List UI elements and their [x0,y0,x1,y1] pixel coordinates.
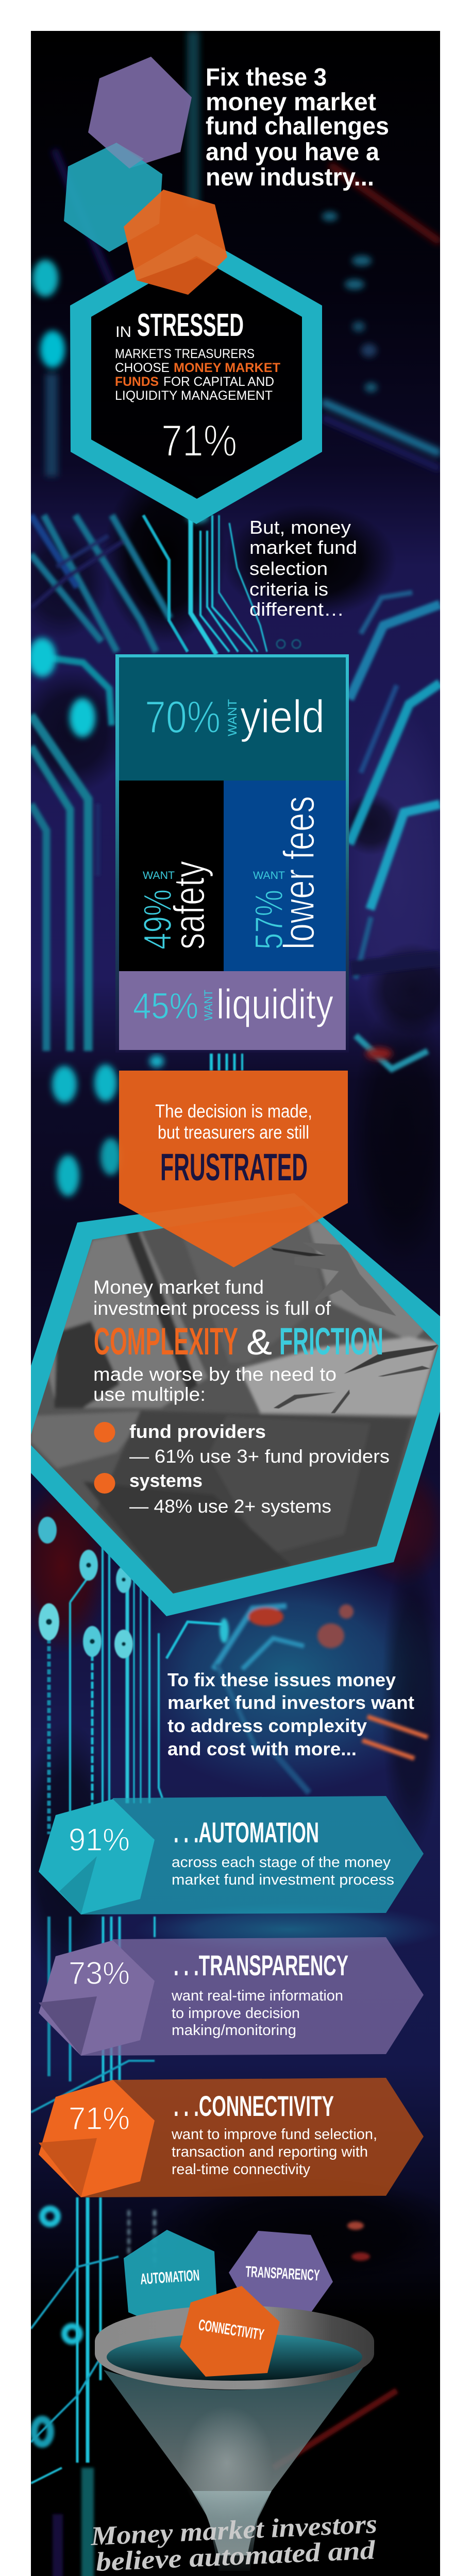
text: made worse: use multiple: [93,1384,206,1405]
icon: teal hexagon 91%: 91% [69,1822,130,1858]
text: selection criteria intro: market fund [249,537,357,558]
cell: safety: WANT [143,870,175,882]
chalk text: money market investors believe: believe automated and [95,2535,376,2576]
cell: lower fees [224,781,346,971]
text: markets treasurers choose money market funds: CHOOSE [115,361,170,375]
panel: frustrated arrow: FRUSTRATED [160,1146,308,1189]
list: fund providers: — 61% use 3+ fund providers [129,1446,390,1467]
text: markets treasurers choose money market funds: FOR CAPITAL AND [163,375,274,389]
text: markets treasurers choose money market funds: FUNDS [115,375,159,389]
text: markets treasurers choose money market funds: LIQUIDITY MANAGEMENT [115,388,273,403]
panel: stressed markets hexagon [70,234,322,524]
cell: yield [119,657,346,781]
heading: complexity and friction: FRICTION [279,1320,383,1363]
cell: lower fees: lower fees [275,796,323,950]
text: to fix these issues: To fix these issues money [167,1669,396,1690]
funnel body [95,2306,374,2571]
text: selection criteria intro: different… [249,599,344,620]
icon: connectivity hexagon [180,2286,280,2377]
panel: transparency: making/monitoring [172,2022,296,2039]
panel: frustrated arrow [119,1071,348,1267]
text: markets treasurers choose money market funds: MONEY MARKET [174,361,280,375]
icon: purple hexagon 73% [39,1940,155,2056]
icon: orange hexagon [124,190,227,295]
heading: complexity and friction [95,1328,382,1355]
text: selection criteria intro: selection [249,558,328,579]
panel: selection criteria treemap [115,654,349,1053]
title [206,64,389,191]
icon: orange hexagon 71%: 71% [69,2101,130,2137]
cell: liquidity: 45% [133,986,198,1027]
panel: automation: market fund investment process [172,1872,394,1888]
panel: transparency: . . .TRANSPARENCY [174,1949,348,1981]
panel: automation: . . .AUTOMATION [174,1816,319,1849]
text: markets treasurers choose money market funds: MARKETS TREASURERS [115,347,255,361]
list: systems: systems [129,1470,203,1491]
heading: in stressed: STRESSED [137,308,244,343]
cell: liquidity [119,971,346,1050]
text: selection criteria intro: criteria is [249,579,328,600]
text: to fix these issues: to address complexity [167,1715,367,1736]
list: fund providers: fund providers [129,1421,266,1442]
text: selection criteria intro: But, money [249,517,351,538]
cell: safety: safety [165,861,213,950]
panel: connectivity: real-time connectivity [172,2161,310,2178]
icon: purple hexagon 73%: 73% [69,1956,130,1991]
chalk text: money market investors believe [90,2510,378,2576]
heading: complexity and friction: COMPLEXITY [94,1320,238,1363]
cell: yield: yield [240,691,325,743]
chalk text: money market investors believe: Money market investors [90,2510,378,2551]
panel: automation: across each stage of the money [172,1854,391,1871]
panel: frustrated arrow: but treasurers are still [158,1122,309,1143]
title: money market [206,89,376,116]
text: made worse: made worse by the need to [93,1364,337,1385]
cell: lower fees: WANT [253,870,285,882]
panel: transparency [39,1937,424,2056]
panel: connectivity: . . .CONNECTIVITY [174,2090,334,2122]
cell: liquidity: liquidity [216,981,333,1028]
text: to fix these issues: market fund investors want [167,1692,414,1713]
circuit traces: bright converging lines [143,495,300,1071]
cell: safety: 49% [136,889,180,950]
icon: teal hexagon 91% [39,1799,155,1914]
title: new industry... [206,164,374,191]
funnel with three hexagons [95,2230,374,2571]
list: systems [94,1470,331,1517]
icon: transparency hexagon [229,2231,333,2325]
cell: lower fees: 57% [247,890,291,950]
circuit traces: top zone [32,31,440,477]
panel: frustrated arrow: The decision is made, [155,1100,312,1122]
heading: in stressed: IN [115,324,131,341]
text: made worse [93,1364,337,1405]
panel: complexity and friction photo hexagon [28,1193,446,1626]
panel: connectivity: want to improve fund selection, [171,2126,377,2143]
panel: transparency: to improve decision [172,2005,300,2022]
cell: yield: 70% [145,691,221,742]
panel: automation [39,1796,424,1914]
text: markets treasurers choose money market funds [115,347,280,403]
text: to fix these issues: and cost with more... [167,1738,357,1759]
text: process is full of [93,1277,331,1319]
circuit traces: blurred around treemap [31,515,440,1069]
icon: orange hexagon 71% [39,2080,155,2197]
panel: connectivity [39,2078,424,2197]
list: systems: — 48% use 2+ systems [129,1496,331,1517]
title: Fix these 3 [206,64,327,91]
panel: transparency: want real-time information [171,1988,343,2004]
stat: 71%: 71% [161,416,237,466]
panel: connectivity: transaction and reporting with [172,2144,368,2160]
heading: complexity and friction: & [246,1322,272,1362]
icon: automation hexagon [124,2230,217,2333]
text: process is full of: investment process is full of [93,1298,331,1319]
text: process is full of: Money market fund [93,1277,264,1298]
icon: connectivity hexagon: CONNECTIVITY [197,2316,265,2344]
heading: in stressed [115,308,244,343]
icon: transparency hexagon: TRANSPARENCY [245,2263,320,2284]
circuit traces: rings and verticals [31,1546,224,2483]
hexagon cluster: purple, teal [64,57,192,252]
cell: yield: WANT [226,699,240,736]
cell: safety [119,781,224,971]
text: selection criteria intro [249,517,357,620]
list: fund providers [94,1421,390,1467]
cell: liquidity: WANT [202,990,215,1021]
title: and you have a [206,139,379,166]
text: to fix these issues [167,1669,414,1759]
title: fund challenges [206,113,389,140]
icon: automation hexagon: AUTOMATION [140,2267,200,2288]
